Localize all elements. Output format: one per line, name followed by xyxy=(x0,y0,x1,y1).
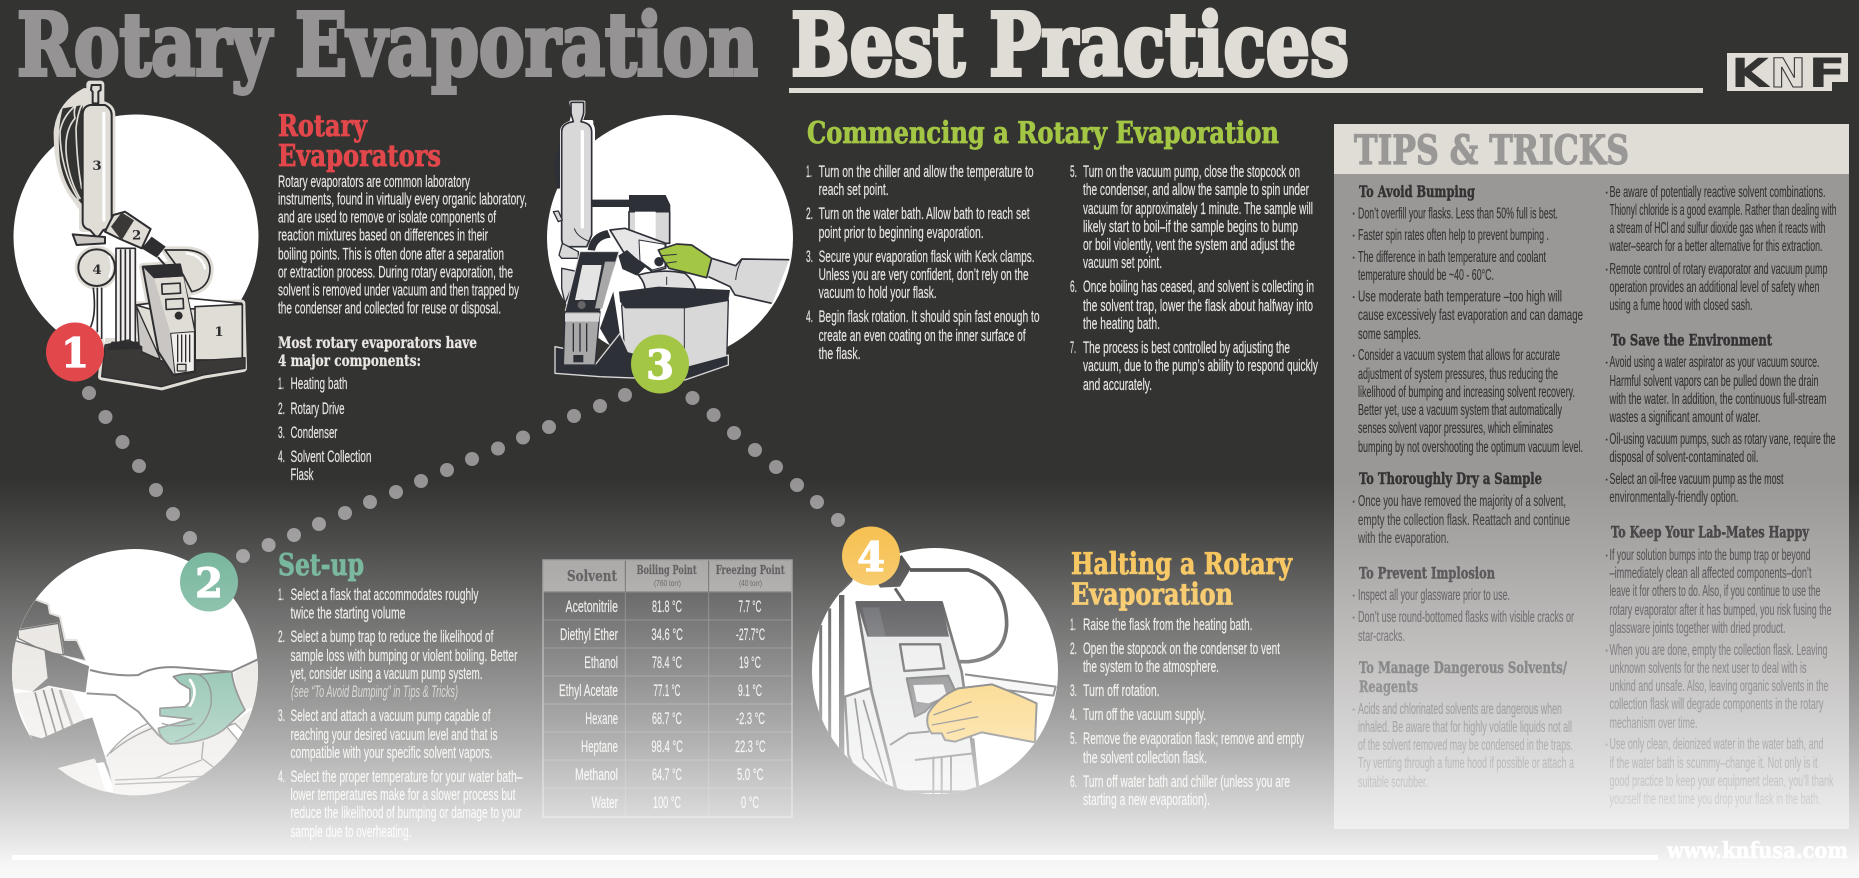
panel: tips and tricks xyxy=(1334,124,1849,829)
list: commencing steps 5-7: the solvent trap, lower the flask about halfway into xyxy=(1083,297,1313,315)
tips column 1: bumping by not overshooting the optimum vacuum level. xyxy=(1358,439,1583,456)
badge 2 xyxy=(180,552,238,612)
table header: Freezing Point xyxy=(716,562,785,577)
subheading: 4 major components: Most rotary evaporators have xyxy=(278,333,477,352)
list: halting steps: Remove the evaporation flask; remove and empty xyxy=(1083,730,1304,748)
list: commencing steps 5-7: 5. xyxy=(1070,163,1077,181)
text: rotary evaporators intro xyxy=(278,173,527,318)
table rows: Acetonitrile xyxy=(566,598,618,616)
table rows: 64.7 °C xyxy=(652,766,682,784)
list: commencing steps 1-4: point prior to beginning evaporation. xyxy=(819,224,984,242)
illustration 1: rotary evaporator with numbered parts: 2 xyxy=(132,227,141,243)
list: set-up steps: 3. xyxy=(278,707,285,725)
tips column 1: Acids and chlorinated solvents are dangerous when xyxy=(1358,701,1562,718)
tips column 1: Once you have removed the majority of a solvent, xyxy=(1358,493,1566,510)
table rows xyxy=(559,598,766,812)
tips column 2: · xyxy=(1604,261,1609,278)
list: components: Rotary Drive xyxy=(290,400,344,418)
list: components: 2. xyxy=(278,400,285,418)
table rows: 22.3 °C xyxy=(735,738,766,756)
tips column 1: Reagents xyxy=(1359,677,1418,696)
list: commencing steps 1-4 xyxy=(806,163,1040,363)
list: commencing steps 5-7: Once boiling has ceased, and solvent is collecting in xyxy=(1083,278,1314,296)
table rows: 68.7 °C xyxy=(652,710,682,728)
tips column 1: To Prevent Implosion xyxy=(1359,564,1495,583)
table rows: 9.1 °C xyxy=(738,682,762,700)
list: commencing steps 1-4: 4. xyxy=(806,308,813,326)
tips column 2: · xyxy=(1604,184,1609,201)
tips column 1: temperature should be ~40 - 60°C. xyxy=(1358,267,1494,284)
list: commencing steps 5-7: Turn on the vacuum pump, close the stopcock on xyxy=(1083,163,1300,181)
list: set-up steps: compatible with your specific solvent vapors. xyxy=(290,744,492,762)
tips column 2: · xyxy=(1604,354,1609,371)
list: commencing steps 1-4: 3. xyxy=(806,248,813,266)
list: commencing steps 5-7: vacuum, due to the pump’s ability to respond quickly xyxy=(1083,357,1318,375)
text: rotary evaporators intro: boiling points. This is often done after a separation xyxy=(278,246,504,264)
tips column 1: · xyxy=(1351,587,1356,604)
list: halting steps: Turn off the vacuum supply. xyxy=(1083,706,1206,724)
tips column 1: adjustment of system pressures, thus reducing the xyxy=(1358,366,1558,383)
tips column 1: suitable scrubber. xyxy=(1358,774,1428,791)
list: halting steps: the solvent collection flask. xyxy=(1083,749,1207,767)
heading: Halting a Rotary Evaporation: Evaporation xyxy=(1071,578,1233,613)
tips column 1: senses solvent vapor pressures, which eliminates xyxy=(1358,420,1553,437)
list: set-up steps: twice the starting volume xyxy=(290,604,406,622)
tips column 1: To Manage Dangerous Solvents/ xyxy=(1359,658,1567,677)
tips column 1 xyxy=(1351,182,1583,791)
list: commencing steps 1-4: the flask. xyxy=(819,345,861,363)
list: commencing steps 5-7: The process is best controlled by adjusting the xyxy=(1083,339,1290,357)
list: set-up steps: reaching your desired vacuum level and that is xyxy=(290,726,498,744)
tips column 1: To Avoid Bumping xyxy=(1359,182,1475,201)
tips column 1: inhaled. Be aware that for highly volatile liquids not all xyxy=(1358,719,1572,736)
tips column 2: mechanism over time. xyxy=(1610,715,1698,732)
illustration 1: rotary evaporator with numbered parts: 3 xyxy=(92,158,102,174)
logo: KNF xyxy=(1727,51,1848,97)
list: commencing steps 1-4: 2. xyxy=(806,205,813,223)
heading: Rotary Evaporators: Evaporators xyxy=(278,139,441,174)
logo: KNF: F xyxy=(1808,51,1846,97)
list: components: Heating bath xyxy=(290,375,348,393)
table rows: 34.6 °C xyxy=(651,626,683,644)
tips column 2: · xyxy=(1604,547,1609,564)
table: solvents xyxy=(543,560,792,817)
subheading: 4 major components xyxy=(278,333,477,370)
illustration 3: gloved hand securing flask xyxy=(547,102,793,380)
list: set-up steps: Select the proper temperature for your water bath– xyxy=(290,768,523,786)
illustration 2: hands holding flask xyxy=(5,549,260,798)
illustration 1: rotary evaporator with numbered parts: 1 xyxy=(214,324,224,340)
illustration 1: rotary evaporator with numbered parts xyxy=(14,84,258,387)
list: halting steps: 5. xyxy=(1070,730,1077,748)
list: set-up steps: reduce the likelihood of bumping or damage to your xyxy=(290,804,522,822)
badge 1 xyxy=(46,322,104,382)
table rows: 78.4 °C xyxy=(652,654,682,672)
heading: Set-up: Set-up xyxy=(278,548,364,583)
list: components: Solvent Collection xyxy=(290,448,372,466)
heading: Rotary Evaporators: Rotary xyxy=(278,109,368,144)
table header xyxy=(567,562,785,588)
table header: Boiling Point xyxy=(637,562,697,577)
heading: Halting a Rotary Evaporation: Halting a Rotary xyxy=(1071,547,1293,582)
badge 1: 1 xyxy=(61,330,89,377)
heading: Halting a Rotary Evaporation xyxy=(1071,547,1293,613)
list: commencing steps 5-7: 6. xyxy=(1070,278,1077,296)
table rows: 100 °C xyxy=(653,794,681,812)
text: rotary evaporators intro: reaction mixtures based on differences in their xyxy=(278,226,488,244)
list: commencing steps 5-7: the condenser, and allow the sample to spin under xyxy=(1083,181,1309,199)
list: commencing steps 1-4: Turn on the water bath. Allow bath to reach set xyxy=(819,205,1030,223)
tips column 1: Faster spin rates often help to prevent bumping . xyxy=(1358,227,1549,244)
list: commencing steps 5-7: vacuum for approximately 1 minute. The sample will xyxy=(1083,200,1313,218)
tips column 2: · xyxy=(1604,471,1609,488)
text: rotary evaporators intro: Rotary evaporators are common laboratory xyxy=(278,173,470,191)
tips column 1: empty the collection flask. Reattach and continue xyxy=(1358,512,1570,529)
logo: KNF: K xyxy=(1731,51,1771,97)
tips column 1: · xyxy=(1351,493,1356,510)
connecting dots xyxy=(82,386,845,563)
list: set-up steps: Select a bump trap to reduce the likelihood of xyxy=(290,628,494,646)
list: commencing steps 1-4: Turn on the chiller and allow the temperature to xyxy=(819,163,1034,181)
tips column 1: Inspect all your glassware prior to use. xyxy=(1358,587,1510,604)
tips column 1: Better yet, use a vacuum system that automatically xyxy=(1358,402,1562,419)
tips column 2: · xyxy=(1604,736,1609,753)
list: halting steps: 2. xyxy=(1070,640,1077,658)
table rows: 5.0 °C xyxy=(737,766,764,784)
list: commencing steps 1-4: Unless you are very confident, don’t rely on the xyxy=(819,266,1029,284)
tips column 1: of the solvent removed may be condensed in the traps. xyxy=(1358,737,1573,754)
table rows: 81.8 °C xyxy=(652,598,682,616)
table header: (760 torr) xyxy=(654,579,681,588)
list: commencing steps 1-4: create an even coating on the inner surface of xyxy=(819,327,1026,345)
tips column 1: · xyxy=(1351,205,1356,222)
tips column 1: To Thoroughly Dry a Sample xyxy=(1359,469,1542,488)
table rows: Water xyxy=(592,794,618,812)
table rows: 19 °C xyxy=(739,654,761,672)
list: set-up steps: 4. xyxy=(278,768,285,786)
tips column 1: star-cracks. xyxy=(1358,628,1405,645)
list: halting steps: Turn off rotation. xyxy=(1083,682,1160,700)
table rows: Heptane xyxy=(581,738,618,756)
table rows: Diethyl Ether xyxy=(560,626,618,644)
tips column 1: Use moderate bath temperature –too high will xyxy=(1358,289,1562,306)
list: set-up steps: sample due to overheating. xyxy=(290,823,412,841)
tips column 2: environmentally-friendly option. xyxy=(1610,489,1738,506)
list: commencing steps 1-4: 1. xyxy=(806,163,812,181)
list: set-up steps: lower temperatures make for a slower process but xyxy=(290,786,516,804)
text: rotary evaporators intro: or extraction process. During rotary evaporation, the xyxy=(278,264,513,282)
illustration 1: rotary evaporator with numbered parts: 4 xyxy=(92,262,102,278)
subheading: 4 major components: 4 major components: xyxy=(278,351,421,370)
list: commencing steps 1-4: vacuum to hold your flask. xyxy=(819,284,937,302)
list: commencing steps 5-7: 7. xyxy=(1070,339,1076,357)
list: set-up steps: Select a flask that accommodates roughly xyxy=(290,586,479,604)
badge 4 xyxy=(842,526,900,586)
tips column 1: Consider a vacuum system that allows for accurate xyxy=(1358,347,1560,364)
tips column 1: · xyxy=(1351,227,1356,244)
text: rotary evaporators intro: the condenser and collected for reuse or disposal. xyxy=(278,300,501,318)
list: commencing steps 5-7: or boil violently, vent the system and adjust the xyxy=(1083,236,1295,254)
badge 3: 3 xyxy=(646,342,674,389)
tips column 1: Don’t overfill your flasks. Less than 50% full is best. xyxy=(1358,205,1558,222)
list: set-up steps: Select and attach a vacuum pump capable of xyxy=(290,707,491,725)
list: components: 1. xyxy=(278,375,284,393)
tips column 1: · xyxy=(1351,289,1356,306)
badge 3 xyxy=(631,334,689,394)
table header: Solvent xyxy=(567,567,617,585)
tips column 1: Try venting through a fume hood if possible or attach a xyxy=(1358,755,1574,772)
list: commencing steps 1-4: reach set point. xyxy=(819,181,889,199)
list: halting steps xyxy=(1070,616,1304,809)
list: halting steps: 6. xyxy=(1070,773,1077,791)
list: set-up steps: sample loss with bumping or violent boiling. Better xyxy=(290,647,518,665)
list: commencing steps 5-7: likely start to boil–if the sample begins to bump xyxy=(1083,218,1298,236)
list: halting steps: Turn off water bath and chiller (unless you are xyxy=(1083,773,1290,791)
panel header: TIPS & TRICKS xyxy=(1354,127,1629,174)
list: set-up steps: (see “To Avoid Bumping” in Tips & Tricks) xyxy=(291,683,458,701)
table rows: 0 °C xyxy=(741,794,759,812)
text: rotary evaporators intro: and are used to remove or isolate components of xyxy=(278,208,496,226)
list: commencing steps 5-7 xyxy=(1070,163,1318,394)
list: commencing steps 5-7: the heating bath. xyxy=(1083,315,1160,333)
tips column 1: · xyxy=(1351,701,1356,718)
table rows: Ethyl Acetate xyxy=(559,682,618,700)
table rows: Methanol xyxy=(575,766,618,784)
list: halting steps: Open the stopcock on the condenser to vent xyxy=(1083,640,1280,658)
tips column 1: · xyxy=(1351,347,1356,364)
list: set-up steps: 1. xyxy=(278,586,284,604)
list: set-up steps: 2. xyxy=(278,628,285,646)
tips column 2: · xyxy=(1604,642,1609,659)
illustration 4: hand on control panel xyxy=(812,548,1058,795)
table rows: 98.4 °C xyxy=(651,738,683,756)
text: rotary evaporators intro: instruments, found in virtually every organic laboratory, xyxy=(278,190,527,208)
tips column 2: To Save the Environment xyxy=(1611,331,1773,350)
table rows: Ethanol xyxy=(584,654,618,672)
list: halting steps: Raise the flask from the heating bath. xyxy=(1083,616,1252,634)
table rows: 77.1 °C xyxy=(654,682,681,700)
list: commencing steps 1-4: Begin flask rotation. It should spin fast enough to xyxy=(819,308,1040,326)
tips column 2 xyxy=(1604,184,1836,808)
list: components: Flask xyxy=(290,466,314,484)
tips column 1: · xyxy=(1351,609,1356,626)
list: components: 3. xyxy=(278,424,285,442)
table rows: -27.7°C xyxy=(736,626,765,644)
tips column 1: likelihood of bumping and increasing solvent recovery. xyxy=(1358,384,1575,401)
tips column 1: some samples. xyxy=(1358,326,1421,343)
list: components: 4. xyxy=(278,448,285,466)
heading: Commencing a Rotary Evaporation: Commencing a Rotary Evaporation xyxy=(807,116,1279,151)
list: halting steps: 4. xyxy=(1070,706,1077,724)
heading: Rotary Evaporators xyxy=(278,109,441,174)
list: halting steps: starting a new evaporation). xyxy=(1083,791,1210,809)
list: halting steps: the system to the atmosphere. xyxy=(1083,658,1219,676)
list: commencing steps 5-7: vacuum set point. xyxy=(1083,254,1162,272)
tips column 2: · xyxy=(1604,431,1609,448)
tips column 1: Don’t use round-bottomed flasks with visible cracks or xyxy=(1358,609,1574,626)
list: commencing steps 5-7: and accurately. xyxy=(1083,376,1152,394)
list: set-up steps: yet, consider using a vacuum pump system. xyxy=(290,665,482,683)
list: commencing steps 1-4: Secure your evaporation flask with Keck clamps. xyxy=(819,248,1035,266)
list: set-up steps xyxy=(278,586,523,841)
list: halting steps: 1. xyxy=(1070,616,1076,634)
title xyxy=(17,0,1349,96)
list: halting steps: 3. xyxy=(1070,682,1077,700)
tips column 1: with the evaporation. xyxy=(1357,530,1449,547)
logo: KNF: N xyxy=(1770,51,1806,97)
list: components: Condenser xyxy=(290,424,338,442)
table rows: -2.3 °C xyxy=(736,710,765,728)
panel header xyxy=(1334,124,1849,174)
tips column 1: The difference in bath temperature and coolant xyxy=(1358,249,1546,266)
table header: (40 torr) xyxy=(739,579,762,588)
table rows: Hexane xyxy=(585,710,618,728)
text: rotary evaporators intro: solvent is removed under vacuum and then trapped by xyxy=(278,282,519,300)
list: components xyxy=(278,375,372,484)
table rows: 7.7 °C xyxy=(738,598,762,616)
badge 2: 2 xyxy=(195,560,223,607)
tips column 1: · xyxy=(1351,249,1356,266)
badge 4: 4 xyxy=(857,534,885,581)
tips column 1: cause excessively fast evaporation and can damage xyxy=(1358,307,1583,324)
